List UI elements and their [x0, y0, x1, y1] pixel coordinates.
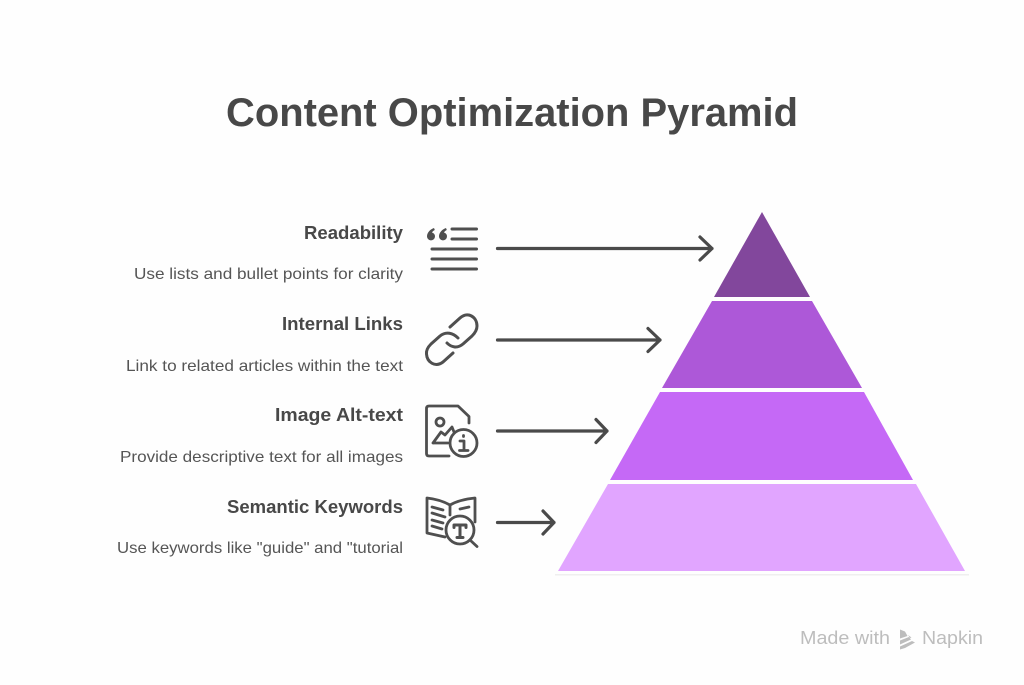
icon: chain link [426, 315, 477, 364]
heading: internal links: Internal Links [282, 314, 403, 334]
pyramid tier: readability [714, 212, 810, 297]
watermark text: napkin: Napkin [922, 628, 983, 648]
description: semantic keywords: Use keywords like "guide" and "tutorial [117, 540, 403, 557]
arrow: image alt-text [498, 420, 607, 442]
pyramid tier: image alt-text [610, 392, 913, 480]
icon: quote and lines [427, 228, 476, 269]
arrow: internal links [498, 328, 660, 352]
item: readability [134, 223, 712, 283]
title: Content Optimization Pyramid [226, 91, 798, 135]
heading: semantic keywords: Semantic Keywords [227, 497, 403, 517]
icon: open book with magnifier [427, 498, 477, 546]
description: internal links: Link to related articles within the text [126, 358, 404, 375]
item: semantic keywords [117, 497, 554, 557]
arrow: semantic keywords [498, 511, 554, 534]
item: image alt-text [120, 405, 607, 466]
description: readability: Use lists and bullet points for clarity [134, 266, 403, 283]
icon: image file with info badge [426, 406, 477, 456]
watermark: made with napkin [800, 628, 983, 650]
arrow: readability [498, 237, 712, 260]
icon: napkin logo [900, 630, 915, 650]
item: internal links [126, 314, 660, 375]
pyramid tier: internal links [662, 301, 862, 388]
pyramid [558, 212, 965, 571]
heading: image alt-text: Image Alt-text [275, 405, 403, 425]
heading: readability: Readability [304, 223, 403, 243]
pyramid tier: semantic keywords [558, 484, 965, 571]
description: image alt-text: Provide descriptive text for all images [120, 449, 403, 466]
watermark text: made with: Made with [800, 628, 890, 648]
